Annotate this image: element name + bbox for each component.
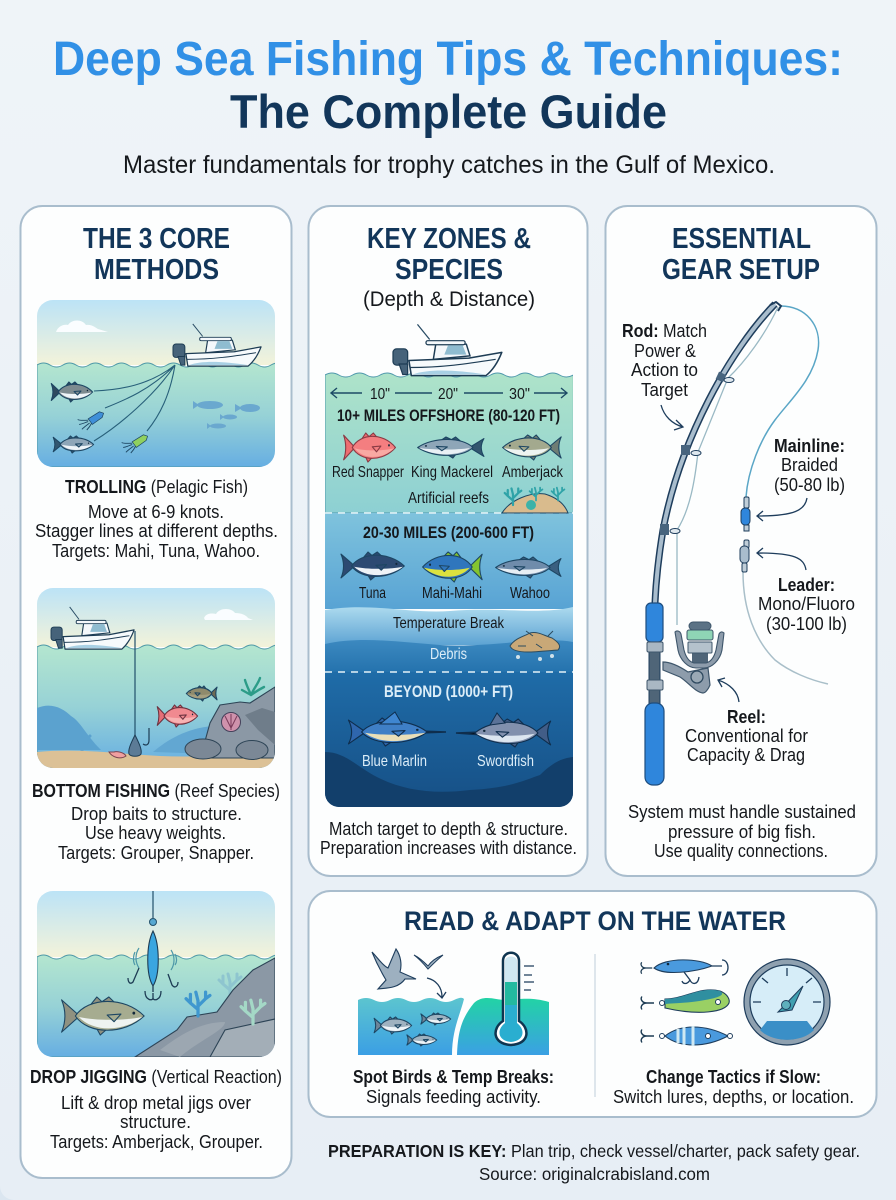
callout: leader: Leader: bbox=[778, 574, 835, 595]
icon: gauge bbox=[744, 959, 830, 1045]
zone: beyond: Blue Marlin bbox=[362, 753, 427, 770]
text: drop jigging: Lift & drop metal jigs over bbox=[61, 1092, 251, 1113]
text: bottom fishing: Targets: Grouper, Snapper. bbox=[58, 842, 254, 863]
text: change tactics: Switch lures, depths, or location. bbox=[613, 1086, 854, 1107]
text: depth summary: Match target to depth & structure. bbox=[329, 818, 568, 839]
text: trolling: TROLLING (Pelagic Fish) bbox=[65, 476, 248, 497]
distance scale: 20" bbox=[438, 386, 458, 403]
heading: key zones and species: KEY ZONES & bbox=[367, 223, 531, 255]
text: spot birds: Spot Birds & Temp Breaks: bbox=[353, 1066, 554, 1087]
icon: birds and temperature break bbox=[358, 949, 549, 1055]
heading: read and adapt: READ & ADAPT ON THE WATER bbox=[404, 906, 786, 936]
text: drop jigging: DROP JIGGING (Vertical Reaction) bbox=[30, 1066, 282, 1087]
heading: key zones and species: (Depth & Distance) bbox=[363, 288, 535, 311]
distance scale bbox=[331, 386, 567, 403]
footer: PREPARATION IS KEY: Plan trip, check vessel/charter, pack safety gear. bbox=[328, 1141, 860, 1161]
zone: 10+ miles offshore: 10+ MILES OFFSHORE (80-120 FT) bbox=[337, 407, 560, 425]
footer: Source: originalcrabisland.com bbox=[479, 1164, 710, 1184]
icon: swordfish bbox=[456, 713, 551, 747]
panel: key zones and species bbox=[308, 206, 588, 876]
panel: the 3 core methods bbox=[20, 206, 292, 1178]
text: change tactics bbox=[613, 1066, 854, 1107]
callout: reel: Reel: bbox=[727, 706, 766, 727]
label: debris: Debris bbox=[430, 646, 467, 663]
callout: mainline bbox=[757, 435, 845, 521]
callout: mainline: Braided bbox=[781, 454, 838, 475]
depth diagram bbox=[325, 373, 573, 808]
text: drop jigging bbox=[30, 1066, 282, 1152]
icon: blue marlin bbox=[348, 712, 446, 746]
text: drop jigging: Targets: Amberjack, Grouper. bbox=[50, 1131, 263, 1152]
scene: bottom fishing bbox=[37, 588, 284, 768]
zone: 10+ miles offshore: Artificial reefs bbox=[408, 490, 489, 507]
fishing line bbox=[677, 306, 828, 684]
footer bbox=[328, 1141, 860, 1184]
callout: reel bbox=[685, 678, 808, 765]
line connectors bbox=[740, 497, 750, 572]
panel: read and adapt on the water bbox=[308, 891, 876, 1117]
icon: artificial reef bbox=[502, 488, 568, 513]
zone: beyond: BEYOND (1000+ FT) bbox=[384, 683, 513, 701]
text: depth summary: Preparation increases with distance. bbox=[320, 837, 577, 858]
callout: rod: Rod: Match bbox=[622, 320, 707, 341]
heading: the 3 core methods: METHODS bbox=[94, 254, 219, 286]
callout: rod: Power & bbox=[634, 340, 697, 361]
text: change tactics: Change Tactics if Slow: bbox=[646, 1066, 821, 1087]
text: spot birds bbox=[353, 1066, 554, 1107]
panel: essential gear setup bbox=[606, 206, 876, 876]
title: The Complete Guide bbox=[230, 86, 667, 139]
callout: mainline: (50-80 lb) bbox=[774, 474, 845, 495]
heading: essential gear setup bbox=[662, 223, 820, 286]
callout: rod: Action to bbox=[631, 359, 698, 380]
text: trolling: Targets: Mahi, Tuna, Wahoo. bbox=[52, 540, 260, 561]
text: spot birds: Signals feeding activity. bbox=[366, 1086, 541, 1107]
zone: 10+ miles offshore: Amberjack bbox=[502, 464, 564, 481]
callout: reel: Capacity & Drag bbox=[687, 744, 805, 765]
callout: reel: Conventional for bbox=[685, 725, 808, 746]
subtitle: Master fundamentals for trophy catches in the Gulf of Mexico. bbox=[123, 151, 775, 179]
zone: 10+ miles offshore: King Mackerel bbox=[411, 464, 493, 481]
icon: lures bbox=[641, 960, 732, 1046]
callout: leader bbox=[757, 548, 855, 634]
callout: mainline: Mainline: bbox=[774, 435, 845, 456]
heading: the 3 core methods bbox=[83, 223, 230, 286]
text: gear summary: pressure of big fish. bbox=[668, 821, 816, 842]
heading: key zones and species bbox=[363, 223, 535, 311]
text: trolling bbox=[35, 476, 278, 561]
text: bottom fishing: Use heavy weights. bbox=[85, 822, 226, 843]
text: gear summary: System must handle sustained bbox=[628, 801, 856, 822]
heading: key zones and species: SPECIES bbox=[395, 254, 503, 286]
zone: 20-30 miles bbox=[341, 524, 561, 602]
callout: leader: Mono/Fluoro bbox=[758, 593, 855, 614]
heading: essential gear setup: GEAR SETUP bbox=[662, 254, 820, 286]
text: bottom fishing bbox=[32, 780, 280, 863]
label: temperature break: Temperature Break bbox=[393, 615, 505, 632]
text: trolling: Move at 6-9 knots. bbox=[88, 501, 224, 522]
callout: leader: (30-100 lb) bbox=[766, 613, 847, 634]
text: bottom fishing: Drop baits to structure. bbox=[71, 803, 242, 824]
callout: rod: Target bbox=[641, 379, 688, 400]
text: trolling: Stagger lines at different depths. bbox=[35, 520, 278, 541]
zone: beyond: Swordfish bbox=[477, 753, 534, 770]
distance scale: 30" bbox=[509, 386, 530, 403]
zone: 20-30 miles: Mahi-Mahi bbox=[422, 585, 482, 602]
distance scale: 10" bbox=[370, 386, 390, 403]
zone: beyond bbox=[348, 683, 551, 770]
title: Deep Sea Fishing Tips & Techniques: bbox=[53, 33, 843, 86]
icon: debris bbox=[510, 631, 560, 661]
zone: 20-30 miles: Wahoo bbox=[510, 585, 550, 602]
zone: 20-30 miles: Tuna bbox=[359, 585, 386, 602]
text: gear summary: Use quality connections. bbox=[654, 840, 828, 861]
callout: rod bbox=[622, 320, 707, 430]
zone: 10+ miles offshore: Red Snapper bbox=[332, 464, 405, 481]
text: depth summary bbox=[320, 818, 577, 858]
scene: trolling bbox=[37, 300, 284, 467]
boat bbox=[393, 324, 502, 376]
fishing rod and reel bbox=[645, 302, 781, 785]
text: gear summary bbox=[628, 801, 856, 861]
text: bottom fishing: BOTTOM FISHING (Reef Species) bbox=[32, 780, 280, 801]
heading: essential gear setup: ESSENTIAL bbox=[672, 223, 811, 255]
reel bbox=[663, 622, 724, 693]
zone: 20-30 miles: 20-30 MILES (200-600 FT) bbox=[363, 524, 534, 542]
divider bbox=[594, 954, 596, 1097]
heading: the 3 core methods: THE 3 CORE bbox=[83, 223, 230, 255]
thermometer bbox=[496, 953, 534, 1045]
zone: 10+ miles offshore bbox=[332, 407, 568, 513]
title bbox=[53, 33, 843, 139]
text: drop jigging: structure. bbox=[120, 1111, 191, 1132]
scene: drop jigging bbox=[37, 891, 284, 1057]
